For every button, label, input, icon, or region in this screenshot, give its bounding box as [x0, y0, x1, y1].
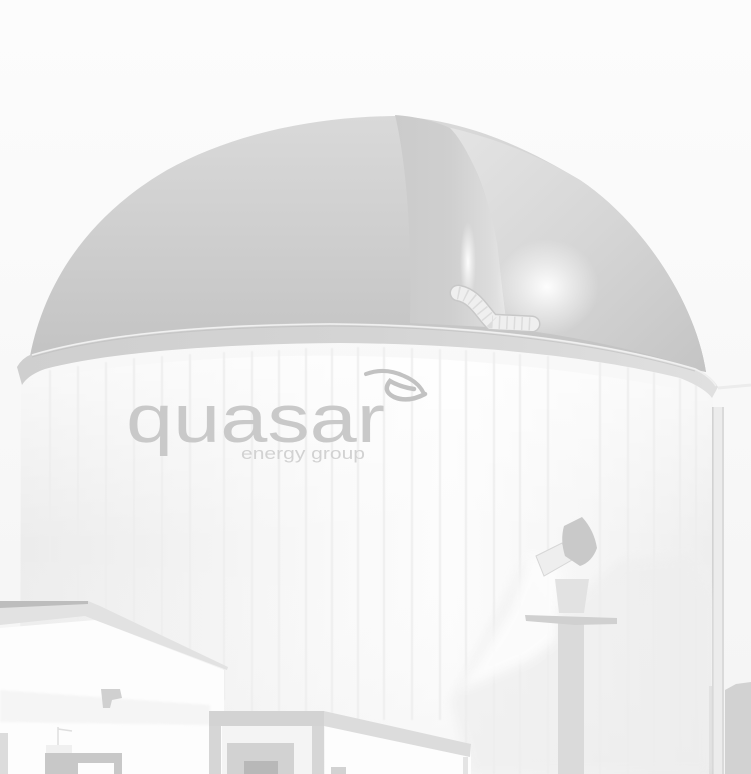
- mast pole: [558, 620, 584, 774]
- dome: centre seam panel: [395, 115, 507, 328]
- dome: glare: [495, 239, 599, 335]
- roof band: [209, 711, 324, 726]
- white building roof and body: [0, 601, 228, 774]
- mast with flare: [525, 517, 617, 774]
- left edge window: [0, 733, 8, 774]
- mast cone: [555, 579, 589, 613]
- flare head: [562, 517, 597, 566]
- tank wall with vertical panels: [20, 347, 713, 774]
- shadow on tank wall: [450, 555, 711, 774]
- flare pipe: [536, 543, 572, 576]
- logo wordmark: quasar: [126, 381, 385, 457]
- dome: right section: [447, 127, 706, 372]
- logo swirl: [366, 371, 425, 399]
- trees at right edge: [725, 682, 751, 774]
- small sign: [331, 767, 346, 774]
- rim of dome: [17, 323, 718, 398]
- entrance door: [227, 743, 294, 774]
- roof fascia: [0, 601, 228, 670]
- mast platform: [525, 615, 617, 625]
- right downpipe: [712, 385, 751, 774]
- logo tagline: energy group: [241, 444, 365, 463]
- corrugated gas pipe on dome: [458, 293, 532, 324]
- logo: [126, 371, 425, 463]
- wall lamp: [101, 689, 122, 708]
- left post: [209, 726, 221, 774]
- dome: [30, 115, 706, 372]
- door frame left: [45, 753, 122, 774]
- lower building entrance: [209, 711, 471, 774]
- right post: [312, 726, 324, 774]
